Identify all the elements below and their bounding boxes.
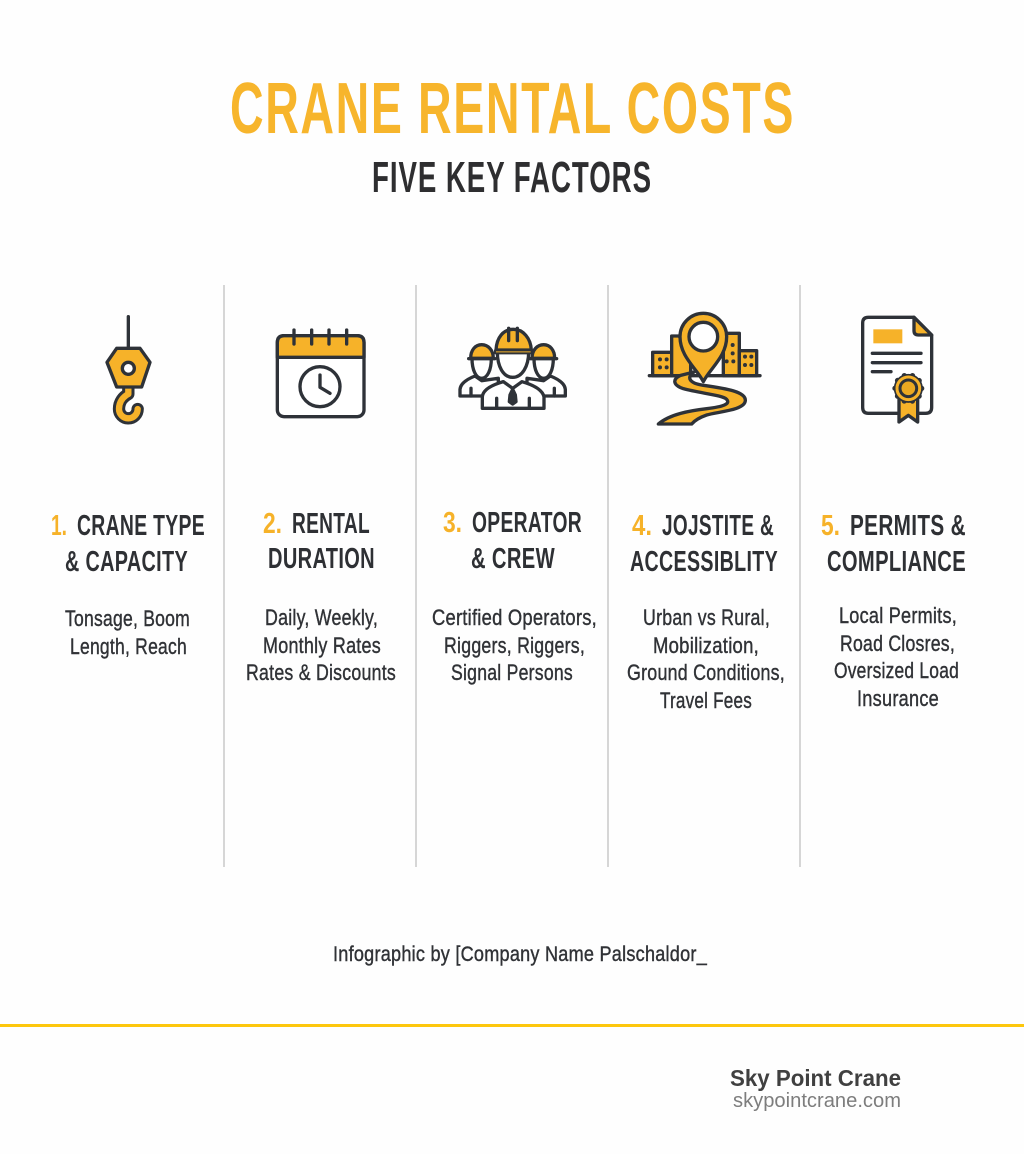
heading: rental duration: DURATION	[268, 543, 375, 575]
text: permits details: Oversized Load	[834, 658, 959, 683]
text: jobsite details: Mobilization,	[653, 633, 759, 658]
footer brand: Sky Point Crane	[730, 1065, 901, 1091]
footer brand	[730, 1065, 901, 1112]
footer brand: skypointcrane.com	[733, 1090, 901, 1112]
text: rental duration details: Rates & Discounts	[246, 660, 396, 685]
text: permits details: Local Permits,	[839, 603, 957, 628]
text: jobsite details: Urban vs Rural,	[643, 605, 770, 630]
heading: operator and crew	[443, 507, 582, 575]
text: crane type details: Tonsage, Boom	[65, 606, 190, 631]
text: rental duration details: Daily, Weekly,	[265, 605, 378, 630]
icon: map pin with city and road	[649, 313, 760, 424]
heading: jobsite and accessibility: 4.	[632, 510, 652, 542]
text: jobsite details: Travel Fees	[660, 688, 752, 713]
panel: jobsite and accessibility	[627, 313, 785, 713]
heading: jobsite and accessibility: ACCESSIBLITY	[630, 546, 778, 578]
text: crane type details	[65, 606, 190, 659]
panel: rental duration	[246, 330, 396, 685]
text: permits details: Insurance	[857, 686, 939, 711]
heading: operator and crew: 3.	[443, 507, 462, 539]
heading: operator and crew: & CREW	[471, 543, 555, 575]
heading: crane type: & CAPACITY	[65, 546, 188, 578]
text: operator and crew details: Riggers, Riggers,	[444, 633, 585, 658]
icon: crane hook	[107, 317, 150, 418]
heading: permits and compliance: COMPLIANCE	[827, 546, 966, 578]
text: operator and crew details: Certified Operators,	[432, 605, 597, 630]
heading: operator and crew: OPERATOR	[472, 507, 582, 539]
attribution text: Infographic by [Company Name Palschaldor_	[333, 942, 708, 966]
icon: certificate document with seal	[863, 317, 932, 422]
heading: permits and compliance: PERMITS &	[850, 510, 966, 542]
text: permits details: Road Closres,	[840, 631, 955, 656]
heading: jobsite and accessibility: JOJSTITE &	[662, 510, 774, 542]
heading: crane type: 1.	[51, 510, 67, 542]
heading: rental duration	[263, 508, 375, 575]
text: rental duration details	[246, 605, 396, 685]
subtitle: FIVE KEY FACTORS	[372, 154, 652, 202]
heading: crane type	[51, 510, 205, 578]
text: crane type details: Length, Reach	[70, 634, 187, 659]
text: permits details	[834, 603, 959, 711]
heading: rental duration: RENTAL	[292, 508, 370, 540]
heading: permits and compliance: 5.	[821, 510, 840, 542]
text: jobsite details: Ground Conditions,	[627, 660, 785, 685]
text: rental duration details: Monthly Rates	[263, 633, 381, 658]
heading: jobsite and accessibility	[630, 510, 778, 578]
panel: crane type and capacity	[51, 317, 205, 659]
text: jobsite details	[627, 605, 785, 713]
heading: rental duration: 2.	[263, 508, 282, 540]
heading: crane type: CRANE TYPE	[77, 510, 205, 542]
text: operator and crew details	[432, 605, 597, 685]
heading: permits and compliance	[821, 510, 966, 578]
icon: crew in hard hats	[460, 328, 565, 408]
icon: calendar with clock	[277, 330, 364, 417]
text: operator and crew details: Signal Persons	[451, 660, 573, 685]
panel: permits and compliance	[821, 317, 966, 711]
panel: operator and crew	[432, 328, 597, 685]
